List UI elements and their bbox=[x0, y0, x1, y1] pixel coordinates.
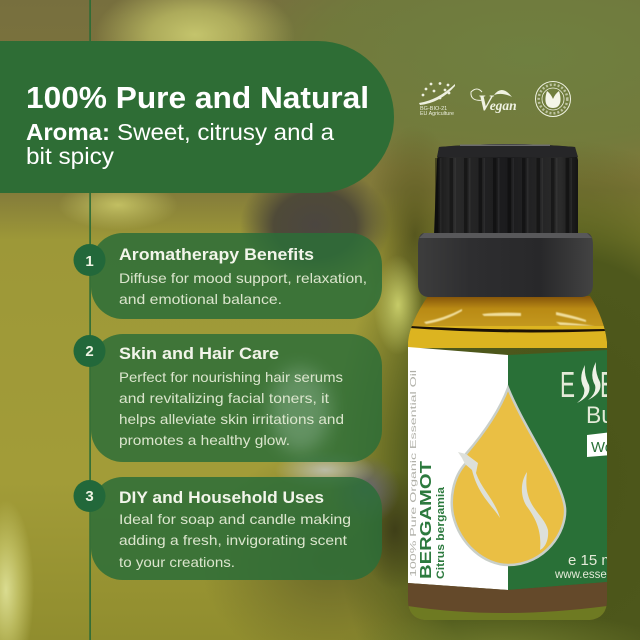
highlight inside panel bbox=[270, 368, 330, 452]
number badge 1 bbox=[74, 244, 106, 276]
body text bbox=[119, 511, 351, 570]
body text bbox=[119, 369, 344, 448]
rotated label text bbox=[409, 370, 447, 579]
bottle base bbox=[408, 582, 607, 613]
glass neck and body: Bu bbox=[586, 402, 614, 429]
number badge 2 bbox=[74, 335, 106, 367]
glass neck and body bbox=[408, 296, 607, 620]
number badge 3 bbox=[74, 480, 106, 512]
body text: Ideal for soap and candle making bbox=[119, 511, 351, 527]
icon: EU organic logo bbox=[419, 82, 455, 117]
panel: DIY and household uses bbox=[74, 477, 382, 580]
collar of cap bbox=[418, 233, 593, 297]
body text: helps alleviate skin irritations and bbox=[119, 411, 344, 427]
icon: EU organic logo: EU Agriculture bbox=[420, 111, 454, 117]
body text: Diffuse for mood support, relaxation, bbox=[119, 270, 367, 286]
body text: to your creations. bbox=[119, 554, 235, 570]
icon: EU organic logo: BG-BIO-21 bbox=[420, 106, 447, 112]
aroma line: bit spicy bbox=[26, 143, 115, 169]
rotated label text: Citrus bergamia bbox=[435, 486, 447, 579]
vertical timeline line bbox=[89, 0, 91, 640]
green label part bbox=[508, 350, 607, 590]
body text: adding a fresh, invigorating scent bbox=[119, 532, 347, 548]
ribbed upper cap bbox=[434, 144, 578, 233]
icon: no animal testing logo bbox=[536, 82, 570, 116]
icon: vegan logo: Vegan bbox=[478, 90, 517, 115]
glass neck and body: e 15 ml bbox=[568, 552, 617, 569]
rotated label text: 100% Pure Organic Essential Oil bbox=[409, 370, 418, 577]
drop highlights bbox=[458, 452, 500, 518]
panel: skin and hair care bbox=[74, 334, 382, 462]
heading: Skin and Hair Care bbox=[119, 344, 279, 363]
number badge 3: 3 bbox=[85, 488, 94, 505]
body text: and revitalizing facial toners, it bbox=[119, 390, 329, 406]
glass neck and body: Wo bbox=[591, 439, 613, 456]
aroma line: Sweet, citrusy and a bbox=[117, 119, 334, 145]
glass neck and body: E bbox=[600, 364, 615, 405]
panel: aromatherapy benefits bbox=[74, 233, 382, 319]
body text: promotes a healthy glow. bbox=[119, 432, 290, 448]
brand text: E bbox=[560, 364, 575, 405]
body text: and emotional balance. bbox=[119, 291, 282, 307]
header panel bbox=[0, 41, 394, 193]
heading: Aromatherapy Benefits bbox=[119, 245, 314, 264]
oil drop bbox=[452, 388, 565, 565]
glass neck and body: www.essential bbox=[554, 569, 628, 581]
aroma line: Aroma: bbox=[26, 119, 110, 145]
bottle bbox=[408, 144, 607, 620]
aroma line bbox=[26, 119, 334, 169]
rotated label text: BERGAMOT bbox=[418, 460, 435, 579]
title: 100% Pure and Natural bbox=[26, 80, 369, 115]
white label part bbox=[408, 347, 508, 590]
number badge 1: 1 bbox=[85, 253, 94, 270]
number badge 2: 2 bbox=[85, 343, 94, 360]
body text bbox=[119, 270, 367, 307]
heading: DIY and Household Uses bbox=[119, 488, 324, 507]
body text: Perfect for nourishing hair serums bbox=[119, 369, 343, 385]
